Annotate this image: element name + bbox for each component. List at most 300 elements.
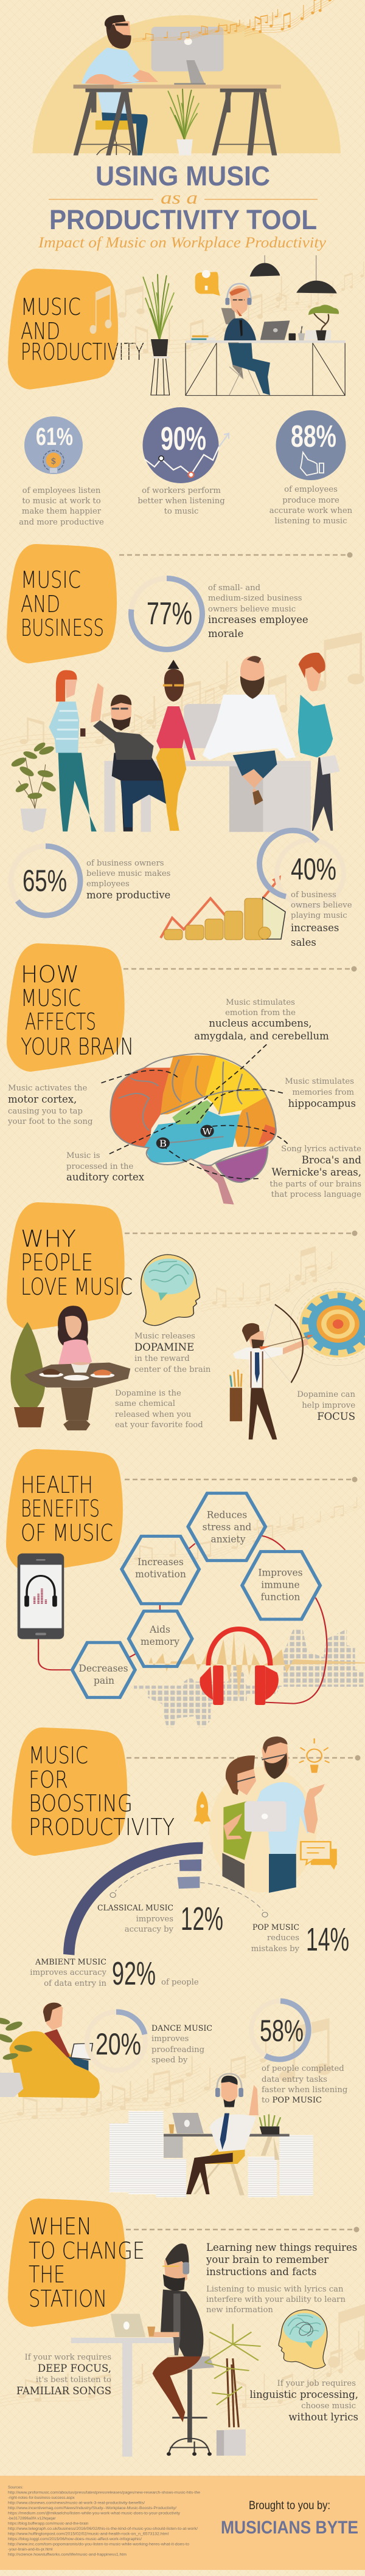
section heading: LOVE MUSIC xyxy=(21,1273,133,1300)
text: auditory cortex xyxy=(66,1151,145,1183)
panel: music for boosting productivity xyxy=(0,1727,361,2197)
text: pop music faster: of people completed xyxy=(262,2064,344,2073)
section heading: BENEFITS xyxy=(21,1495,100,1522)
man with beard xyxy=(256,1737,325,1893)
ring chart: 58%: 58% xyxy=(260,2014,304,2048)
text: learning new things: instructions and facts xyxy=(206,2266,316,2278)
beanbag xyxy=(9,2031,100,2098)
faint notes backdrop xyxy=(0,2304,365,2414)
text: auditory cortex: Music is xyxy=(66,1151,100,1160)
text: pop music faster: faster when listening xyxy=(262,2085,348,2095)
faint notes backdrop xyxy=(0,2018,332,2124)
text: hippocampus: hippocampus xyxy=(288,1098,356,1109)
text: same chemical: eat your favorite food xyxy=(115,1421,203,1430)
text: deep focus: FAMILIAR SONGS xyxy=(16,2385,111,2397)
ring chart: 65%: 65% xyxy=(23,864,67,898)
text: focus: help improve xyxy=(302,1401,355,1410)
text: 77% detail: owners believe music xyxy=(208,605,296,614)
ring chart: 20% xyxy=(87,2012,145,2070)
hexagon: decreases pain: Decreases xyxy=(78,1663,128,1674)
text: motor cortex xyxy=(7,1084,93,1126)
stat: 88%: of employees xyxy=(284,485,338,494)
bearded man sitting on desk xyxy=(203,656,296,805)
sources list: http://www.huffingtonpost.com/2015/02/02/music-and-health-rock-on_n_6573132.html xyxy=(8,2532,169,2536)
text: 40% detail: of business xyxy=(291,890,336,900)
faint notes backdrop xyxy=(119,1497,362,1566)
text: linguistic processing xyxy=(249,2379,358,2423)
marker: Broca's area: B xyxy=(159,1138,167,1149)
smartphone with headphones icon xyxy=(18,1554,64,1639)
sources list: http://www.incentivemag.com//News/Industry/Study--Workplace-Music-Boosts-Productivity/ xyxy=(8,2506,176,2510)
stat: pop music 14%: mistakes by xyxy=(251,1944,300,1954)
text: auditory cortex: processed in the xyxy=(66,1162,134,1171)
text: 77% detail: of small- and xyxy=(208,584,261,593)
man seated in grey shirt xyxy=(91,683,167,832)
sources list: http://www.cbsnews.com/news/music-at-work-3-real-productivity-benefits/ xyxy=(8,2501,145,2505)
text: same chemical: Dopamine is the xyxy=(115,1389,181,1398)
hero illustration xyxy=(33,0,341,156)
text: learning new things: your brain to remember xyxy=(206,2254,328,2265)
faint notes backdrop xyxy=(0,632,364,755)
dashed connector xyxy=(127,1755,360,1760)
title: as a xyxy=(161,188,198,208)
section heading xyxy=(21,294,144,365)
ring chart: 77%: 77% xyxy=(147,596,192,632)
sources list: http://www.prsformusic.com/aboutus/press/latestpressreleases/pages/new-research-shows-music-hits-the xyxy=(8,2491,200,2495)
man at desk xyxy=(82,15,158,156)
woman with coffee xyxy=(49,670,97,832)
marker: Wernicke's area: W xyxy=(202,1127,212,1137)
stat: 90%: of workers perform xyxy=(142,486,221,495)
section blob xyxy=(8,269,118,390)
icon: rising chart line xyxy=(144,433,229,477)
text: 40% detail: increases xyxy=(291,922,339,934)
hexagon: aids memory: Aids xyxy=(149,1624,170,1635)
credit xyxy=(221,2499,358,2538)
arc chart xyxy=(63,1842,268,1955)
equalizer dots xyxy=(134,1629,365,1727)
bonsai plant xyxy=(308,305,339,340)
woman at table xyxy=(58,1306,92,1366)
stat: 90% xyxy=(137,407,229,516)
desk xyxy=(164,2134,290,2195)
text: linguistic processing: without lyrics xyxy=(288,2411,358,2423)
sources list: -your-brain-and-its-pr.html xyxy=(8,2547,53,2552)
text: focus: FOCUS xyxy=(317,1411,355,1422)
stat: 61%: to music at work to xyxy=(22,497,101,506)
laptop xyxy=(111,2314,145,2337)
text: hippocampus: Music stimulates xyxy=(285,1077,354,1086)
stat: 61%: and more productive xyxy=(19,518,104,527)
hexagon: aids memory xyxy=(129,1611,192,1667)
text: pop music faster: to POP MUSIC xyxy=(262,2096,322,2105)
section heading: AND xyxy=(21,318,60,345)
text: emotion: Music stimulates xyxy=(226,998,295,1007)
text: dopamine release: Music releases xyxy=(134,1332,195,1341)
stat: 61%: make them happier xyxy=(22,507,102,516)
text: same chemical: same chemical xyxy=(115,1399,175,1408)
marker: Wernicke's area xyxy=(201,1125,214,1137)
section heading: HOW xyxy=(21,961,79,988)
bow and arrow xyxy=(260,1304,313,1383)
scene: beanbag reader xyxy=(0,2003,100,2098)
stat: pop music 14%: POP MUSIC xyxy=(252,1923,299,1932)
hexagon: decreases pain: pain xyxy=(94,1675,114,1686)
text: language areas: the parts of our brains xyxy=(269,1180,361,1189)
title: USING MUSIC xyxy=(96,160,270,191)
text: language areas xyxy=(269,1145,361,1199)
stat: 88%: accurate work when xyxy=(269,506,353,515)
stat: classical music 12%: CLASSICAL MUSIC xyxy=(97,1904,173,1913)
bar: pop xyxy=(178,1876,200,1889)
pendant lamps xyxy=(250,255,337,294)
text: deep focus: DEEP FOCUS, xyxy=(38,2363,111,2374)
cerebellum xyxy=(215,1147,268,1182)
text: 77% detail xyxy=(208,584,308,639)
sources list: https://medium.com/@mikaelcho/listen-while-you-work-what-music-does-to-your-productivity xyxy=(8,2512,181,2515)
bar: ambient xyxy=(63,1842,203,1955)
stat: 88%: 88% xyxy=(291,419,336,453)
worker with headphones xyxy=(186,2074,259,2194)
hexagon: improves immune function: immune xyxy=(261,1579,300,1590)
sources list: http://science.howstuffworks.com/life/music-and-happiness1.htm xyxy=(8,2553,127,2557)
stat: 61%: 61% xyxy=(36,422,73,450)
man in teal sweater xyxy=(298,653,340,831)
scene: dopamine xyxy=(10,1255,365,1439)
hexagon: reduces stress: Reduces xyxy=(207,1509,247,1520)
section heading: YOUR BRAIN xyxy=(21,1033,134,1060)
section heading: FOR xyxy=(29,1766,68,1793)
stat: 88% xyxy=(269,410,353,526)
text: deep focus xyxy=(16,2353,111,2397)
panel: when to change the station xyxy=(0,2199,365,2457)
section heading xyxy=(29,2213,145,2312)
icon: head with tangled brain xyxy=(279,2310,327,2369)
chart: coins and arrow xyxy=(161,875,285,940)
leader end markers xyxy=(110,1893,268,1917)
text: dance music: proofreading xyxy=(151,2045,205,2054)
stat: 90%: to music xyxy=(164,507,198,516)
text: 77% detail: increases employee xyxy=(208,614,308,625)
panel: how music affects your brain xyxy=(7,943,361,1205)
hero sun semicircle xyxy=(33,15,341,153)
text: 65% detail: of business owners xyxy=(86,859,164,868)
icon: thumbs up xyxy=(301,452,324,475)
text: 40% detail: owners believe xyxy=(291,901,352,910)
table with food xyxy=(24,1362,130,1430)
text: deep focus: If your work requires xyxy=(24,2353,111,2362)
sources list: Sources: xyxy=(8,2485,23,2490)
office scene xyxy=(143,255,346,396)
text: focus xyxy=(297,1390,355,1422)
ring chart: 40% xyxy=(260,830,344,907)
brain lobes xyxy=(111,1054,275,1165)
text: motor cortex: your foot to the song xyxy=(7,1117,93,1126)
section heading: HEALTH xyxy=(21,1472,93,1498)
archer xyxy=(230,1323,308,1439)
credit: Brought to you by: xyxy=(249,2499,330,2512)
section heading: STATION xyxy=(29,2285,107,2312)
ring chart: 58% xyxy=(251,2001,310,2059)
icon: light bulb xyxy=(299,1738,330,1773)
section heading: MUSIC xyxy=(21,567,81,593)
cypress plant xyxy=(10,1322,45,1427)
section heading: BOOSTING xyxy=(29,1790,133,1817)
text: emotion xyxy=(194,998,329,1042)
sources list: http://www.inc.com/tom-popomaronis/do-you-listen-to-music-while-working-heres-what-it-does-to xyxy=(8,2542,189,2547)
section heading: PRODUCTIVITY xyxy=(29,1814,175,1841)
section blob xyxy=(7,544,117,663)
woman in red and yellow xyxy=(156,659,195,831)
hexagon: improves immune function: function xyxy=(261,1591,300,1602)
stat: 88%: produce more xyxy=(282,496,339,505)
text: dance music xyxy=(151,2024,212,2065)
red headphones xyxy=(200,1627,279,1705)
section heading xyxy=(21,567,104,641)
desk frame xyxy=(186,340,346,396)
icon: chat bubbles xyxy=(301,1842,337,1870)
text: dopamine release: in the reward xyxy=(134,1354,190,1363)
sources list: https://blog.toggl.com/2015/06/how-does-music-affect-work-infographic/ xyxy=(8,2537,142,2541)
hexagon: decreases pain xyxy=(72,1642,135,1698)
hexagon: improves immune function: Improves xyxy=(258,1567,303,1578)
text: dance music: improves xyxy=(151,2034,189,2044)
text: dance music: speed by xyxy=(151,2056,188,2065)
text: lyrics interfere: new information xyxy=(206,2306,273,2315)
section heading: MUSIC xyxy=(21,294,81,320)
hexagon: improves immune function xyxy=(242,1552,320,1619)
text: deep focus: it's best tolisten to xyxy=(36,2375,111,2385)
title: PRODUCTIVITY TOOL xyxy=(49,204,317,235)
stat: ambient music 92%: AMBIENT MUSIC xyxy=(35,1958,106,1967)
stat: classical music 12%: accuracy by xyxy=(125,1925,174,1934)
section blob xyxy=(7,943,125,1072)
stat: ambient music 92%: 92% xyxy=(112,1955,156,1992)
icon: head with brain xyxy=(141,1255,200,1326)
section heading: THE xyxy=(29,2261,65,2288)
benefits diagram xyxy=(18,1493,365,1727)
text: dopamine release: DOPAMINE xyxy=(134,1341,194,1353)
text: linguistic processing: linguistic processing, xyxy=(249,2389,358,2400)
section blob xyxy=(8,2199,126,2327)
text: language areas: that process language xyxy=(271,1190,361,1199)
target gear xyxy=(290,1283,365,1366)
dashed pointer arrows xyxy=(101,1044,288,1179)
dashed connector xyxy=(125,1477,358,1482)
potted plant xyxy=(10,741,57,832)
paper stacks xyxy=(109,2111,313,2197)
section heading: MUSIC xyxy=(29,1742,88,1769)
team scene xyxy=(10,653,340,832)
text: motor cortex: motor cortex, xyxy=(8,1093,77,1105)
desk xyxy=(104,761,311,832)
text: dance music: DANCE MUSIC xyxy=(151,2024,212,2033)
section heading: PEOPLE xyxy=(21,1249,93,1276)
woman with glasses xyxy=(222,1755,256,1889)
title: Impact of Music on Workplace Productivity xyxy=(38,235,327,251)
floor plant on stand xyxy=(143,275,174,395)
brain stem xyxy=(193,1158,234,1205)
text: pop music faster: data entry tasks xyxy=(262,2075,327,2084)
text: 40% detail: playing music xyxy=(291,911,347,920)
sources list: http://www.telegraph.co.uk/business/2016/06/02/this-is-the-kind-of-music-you-should-listen-to-at-work/ xyxy=(8,2527,198,2531)
text: auditory cortex: auditory cortex xyxy=(66,1171,145,1183)
soft backdrop xyxy=(209,1767,316,1892)
sources list: -be3172896a0f#.v12hqaqar xyxy=(8,2516,56,2521)
section blob xyxy=(12,1727,127,1856)
icon: rocket xyxy=(193,1791,210,1825)
stool xyxy=(167,2357,214,2456)
ring chart: 40%: 40% xyxy=(291,852,336,886)
section blob xyxy=(6,1449,123,1572)
hexagon: aids memory: memory xyxy=(141,1636,179,1647)
text: emotion: amygdala, and cerebellum xyxy=(194,1030,329,1042)
text: language areas: Broca's and xyxy=(302,1154,361,1166)
man with headphones xyxy=(221,284,270,395)
dashed connector xyxy=(126,2227,359,2232)
text: lyrics interfere: Listening to music with lyrics can xyxy=(206,2285,344,2294)
dashed connector xyxy=(119,552,353,558)
text: focus: Dopamine can xyxy=(297,1390,355,1399)
section heading: PRODUCTIVITY xyxy=(21,339,144,365)
text: learning new things: Learning new things requires xyxy=(206,2242,357,2253)
dashed leader lines xyxy=(115,1863,263,1910)
title xyxy=(38,160,327,251)
hexagon: reduces stress: anxiety xyxy=(210,1534,246,1545)
text: 40% detail xyxy=(291,890,352,948)
icon: gear bulb: $ xyxy=(51,456,56,466)
man seated on stool xyxy=(149,2244,203,2422)
ring chart: 77% xyxy=(131,579,202,649)
dashed connector xyxy=(125,1230,358,1236)
scene: data entry worker xyxy=(109,2074,313,2197)
monitor xyxy=(151,27,223,84)
text: hippocampus: memories from xyxy=(292,1088,354,1097)
section heading xyxy=(21,1472,113,1546)
music notes trail xyxy=(133,0,335,43)
sound waveform xyxy=(149,1632,365,1699)
man reading xyxy=(43,2003,92,2071)
laptop and desk items xyxy=(191,320,331,340)
stat: classical music 12%: improves xyxy=(136,1915,173,1924)
text: motor cortex: Music activates the xyxy=(8,1084,87,1093)
stat: ambient music 92%: of people xyxy=(161,1978,199,1987)
section heading xyxy=(21,961,134,1060)
dashed connector xyxy=(123,966,356,971)
text: hippocampus xyxy=(285,1077,356,1109)
scene: man at standing desk xyxy=(71,2244,327,2457)
icon: gear bulb xyxy=(43,450,64,473)
hexagon: reduces stress: stress and xyxy=(203,1521,251,1532)
ring chart: 20%: 20% xyxy=(96,2027,141,2061)
brain diagram xyxy=(101,1044,288,1205)
stat: ambient music 92%: of data entry in xyxy=(44,1979,106,1988)
text: linguistic processing: choose music xyxy=(301,2402,356,2411)
couple scene xyxy=(193,1737,337,1893)
stat: pop music 14% xyxy=(251,1921,349,1958)
text: 77% detail: morale xyxy=(208,628,243,639)
potted plant xyxy=(0,2016,33,2097)
section heading: OF MUSIC xyxy=(21,1520,113,1546)
text: emotion: nucleus accumbens, xyxy=(209,1018,312,1029)
potted plant xyxy=(168,89,199,156)
marker: Broca's area xyxy=(156,1137,170,1149)
ring chart: 65% xyxy=(11,846,80,915)
stat: 61%: of employees listen xyxy=(23,486,101,495)
coffee cup xyxy=(147,2327,155,2336)
panel: why people love music xyxy=(7,1202,365,1439)
stat: ambient music 92% xyxy=(30,1955,199,1992)
text: 65% detail: more productive xyxy=(86,889,170,901)
panel: music and productivity xyxy=(8,255,365,527)
laptop xyxy=(169,2113,204,2133)
hexagon: increases motivation: motivation xyxy=(135,1569,186,1580)
section heading: MUSIC xyxy=(21,985,81,1011)
section heading: BUSINESS xyxy=(21,615,104,641)
stat: ambient music 92%: improves accuracy xyxy=(30,1968,107,1977)
text: same chemical: released when you xyxy=(115,1410,191,1419)
text: dopamine release xyxy=(134,1332,211,1374)
idea speech bubble xyxy=(195,270,220,296)
red cable xyxy=(38,1536,327,1704)
hexagon: increases motivation xyxy=(122,1536,199,1603)
text: 65% detail: believe music makes xyxy=(86,869,171,878)
section blob xyxy=(7,1202,125,1330)
text: 65% detail: employees xyxy=(86,880,130,889)
stat: classical music 12% xyxy=(97,1901,223,1937)
text: 77% detail: medium-sized business xyxy=(208,594,302,603)
sources list: https://blog.bufferapp.com/music-and-the-brain xyxy=(8,2521,89,2526)
desk plant xyxy=(260,2114,280,2135)
section heading xyxy=(29,1742,175,1841)
section heading xyxy=(21,1225,133,1300)
stat: 88%: listening to music xyxy=(275,517,347,526)
laptop xyxy=(245,1801,287,1831)
faint notes backdrop xyxy=(201,1246,338,1312)
text: motor cortex: causing you to tap xyxy=(8,1107,83,1116)
text: 65% detail xyxy=(86,859,171,901)
desk xyxy=(71,2338,182,2457)
section heading: WHY xyxy=(21,1225,76,1252)
sources list: -right-notes-for-business-success.aspx xyxy=(8,2496,75,2500)
text: 40% detail: sales xyxy=(291,937,316,948)
tall potted plant xyxy=(205,2324,261,2456)
hexagon: reduces stress xyxy=(188,1493,265,1560)
text: dopamine release: center of the brain xyxy=(134,1365,211,1374)
stat: 61% xyxy=(19,416,104,527)
text: emotion: emotion from the xyxy=(225,1008,296,1018)
section heading: TO CHANGE xyxy=(29,2237,145,2264)
panel: music and business xyxy=(0,544,364,948)
section heading: WHEN xyxy=(29,2213,92,2240)
hexagon: increases motivation: Increases xyxy=(137,1557,184,1568)
text: language areas: Wernicke's areas, xyxy=(272,1166,361,1178)
text: lyrics interfere: interfere with your ability to learn xyxy=(206,2295,346,2304)
text: language areas: Song lyrics activate xyxy=(281,1145,361,1154)
stat: 90%: better when listening xyxy=(137,497,225,506)
bar: classical xyxy=(179,1859,201,1871)
desk with trestle legs xyxy=(74,84,281,156)
section heading: AND xyxy=(21,591,60,618)
panel: health benefits of music xyxy=(6,1449,365,1727)
chair xyxy=(200,2124,245,2164)
text: linguistic processing: If your job requires xyxy=(277,2379,356,2388)
grey monitor xyxy=(184,704,223,748)
section heading: AFFECTS xyxy=(25,1008,96,1035)
stat: classical music 12%: 12% xyxy=(181,1901,223,1937)
panel: footer xyxy=(0,2476,365,2570)
stat: pop music 14%: reduces xyxy=(267,1934,299,1943)
